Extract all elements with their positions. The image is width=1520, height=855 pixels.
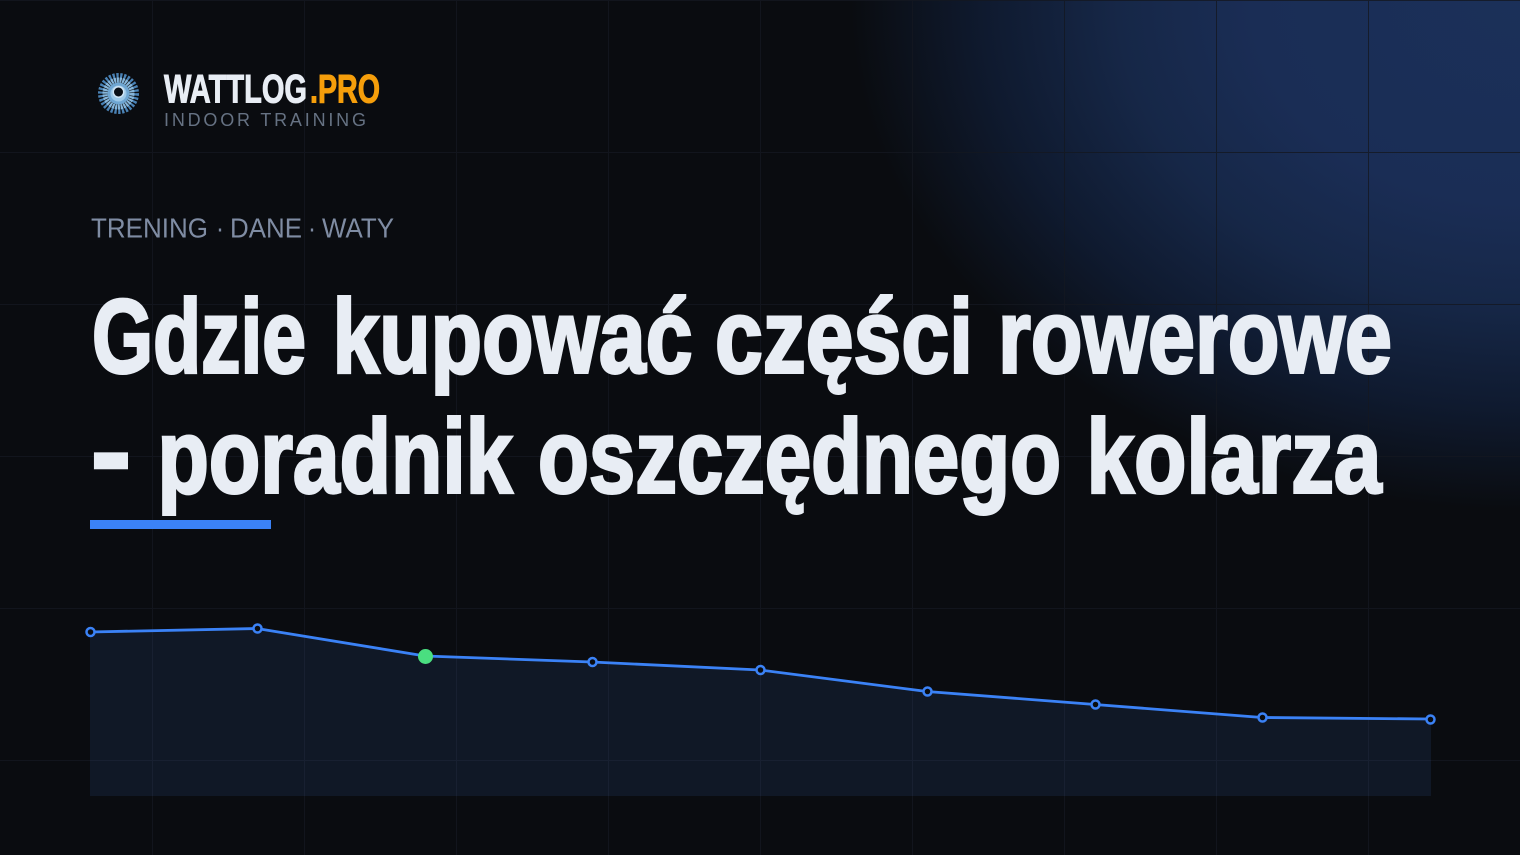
title: kupować bbox=[332, 278, 692, 396]
eyebrow label: · bbox=[216, 212, 224, 244]
eyebrow label: DANE bbox=[230, 212, 302, 244]
title accent underline bbox=[90, 520, 271, 529]
title: części bbox=[715, 278, 973, 396]
eyebrow label: TRENING bbox=[91, 212, 208, 244]
chart line bbox=[90, 628, 1430, 719]
title: rowerowe bbox=[998, 278, 1392, 396]
title: poradnik bbox=[158, 398, 513, 516]
eyebrow label: WATY bbox=[322, 212, 394, 244]
highlighted data point bbox=[418, 649, 433, 664]
chart area fill bbox=[90, 628, 1431, 796]
icon: cassette sprocket logo bbox=[101, 76, 136, 111]
title: – bbox=[94, 395, 128, 512]
brand wordmark: WATTLOG bbox=[164, 68, 307, 112]
eyebrow label bbox=[91, 212, 394, 244]
title: Gdzie bbox=[92, 278, 306, 396]
title: kolarza bbox=[1086, 398, 1383, 516]
brand wordmark: .PRO bbox=[310, 68, 380, 112]
title bbox=[92, 278, 1392, 516]
line chart bbox=[86, 624, 1434, 796]
chart data points bbox=[86, 624, 1434, 724]
title: oszczędnego bbox=[538, 398, 1061, 516]
brand tagline: INDOOR TRAINING bbox=[164, 110, 366, 130]
eyebrow label: · bbox=[308, 212, 316, 244]
